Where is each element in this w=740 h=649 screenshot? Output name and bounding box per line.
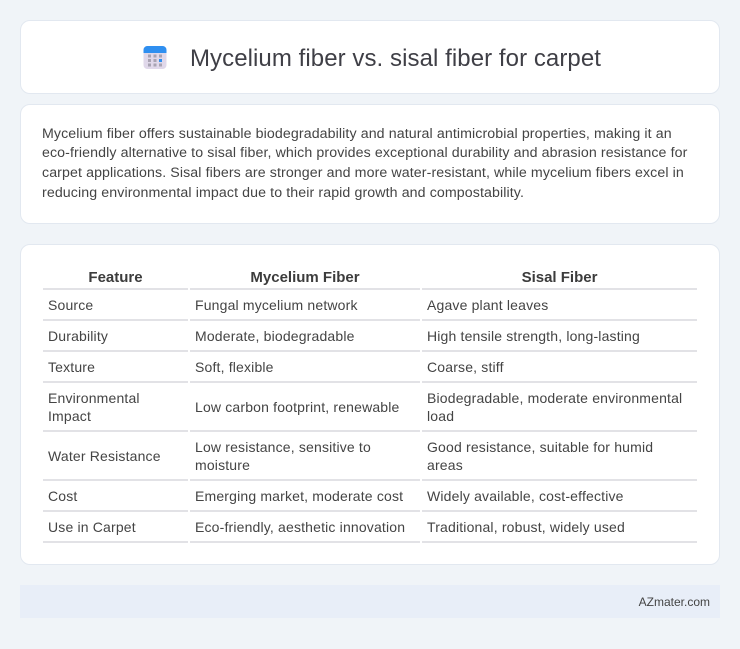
table card [20, 244, 720, 565]
row: use in carpet: Traditional, robust, widely used [427, 519, 625, 535]
row: cost: Emerging market, moderate cost [195, 488, 403, 504]
row: source: Fungal mycelium network [195, 297, 358, 313]
description text: eco-friendly alternative to sisal fiber, which provides exceptional durability and abrasion resistance for [42, 145, 687, 161]
description text [42, 126, 688, 200]
row: water resistance [48, 439, 653, 473]
row: use in carpet: Eco-friendly, aesthetic innovation [195, 519, 405, 535]
row: texture [48, 359, 504, 375]
row: water resistance: Good resistance, suitable for humid [427, 439, 653, 455]
row: texture: Coarse, stiff [427, 359, 504, 375]
title: Mycelium fiber vs. sisal fiber for carpet [190, 45, 601, 72]
row: water resistance: Low resistance, sensitive to [195, 439, 371, 455]
table header: Mycelium Fiber [250, 269, 360, 286]
footer credit: AZmater.com [639, 595, 710, 609]
row: environmental impact: Biodegradable, moderate environmental [427, 390, 682, 406]
row: source [48, 297, 548, 313]
comparison table [43, 269, 697, 543]
title card [20, 20, 720, 94]
table header: Feature [88, 269, 143, 286]
row: environmental impact: Environmental [48, 390, 140, 406]
row: source: Source [48, 297, 93, 313]
icon: calendar [144, 46, 166, 69]
row: environmental impact: Impact [48, 408, 91, 424]
row: use in carpet: Use in Carpet [48, 519, 136, 535]
row: water resistance: areas [427, 457, 463, 473]
row: cost: Widely available, cost-effective [427, 488, 624, 504]
row: texture: Soft, flexible [195, 359, 274, 375]
description text: reducing environmental impact due to their rapid growth and compostability. [42, 184, 524, 200]
row: cost: Cost [48, 488, 77, 504]
row: water resistance: Water Resistance [48, 448, 161, 464]
row: use in carpet [48, 519, 625, 535]
row: cost [48, 488, 624, 504]
row: durability: Durability [48, 328, 108, 344]
description text: Mycelium fiber offers sustainable biodegradability and natural antimicrobial properties, making it an [42, 126, 672, 142]
description text: carpet applications. Sisal fibers are stronger and more water-resistant, while mycelium fibers excel in [42, 165, 684, 181]
row: environmental impact: Low carbon footprint, renewable [195, 399, 400, 415]
row: durability: Moderate, biodegradable [195, 328, 355, 344]
row: texture: Texture [48, 359, 95, 375]
row: environmental impact: load [427, 408, 454, 424]
table header [88, 269, 598, 286]
row: durability: High tensile strength, long-lasting [427, 328, 640, 344]
row: environmental impact [48, 390, 682, 424]
row: water resistance: moisture [195, 457, 250, 473]
description card [20, 104, 720, 224]
row: durability [48, 328, 640, 344]
table header: Sisal Fiber [522, 269, 597, 286]
row: source: Agave plant leaves [427, 297, 548, 313]
footer bar [20, 585, 720, 618]
